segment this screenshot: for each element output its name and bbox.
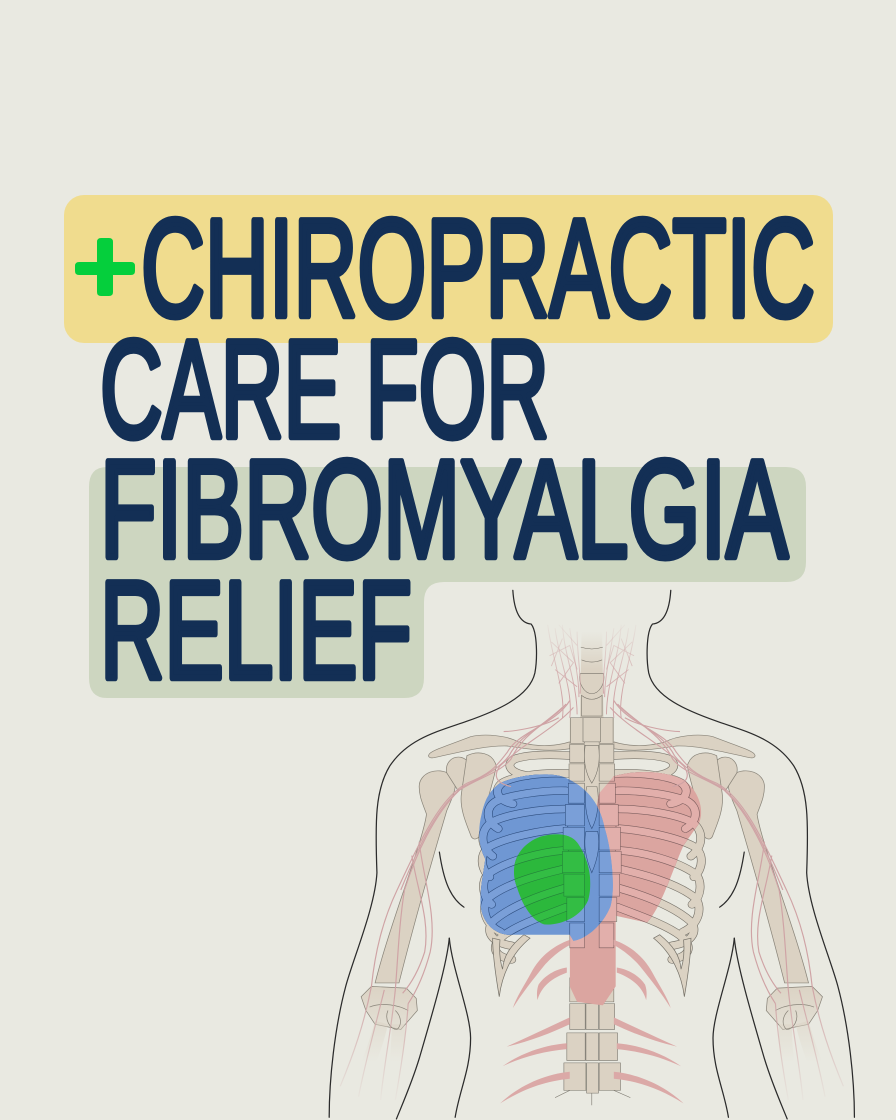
- nerves: neck bundle: [548, 625, 636, 718]
- skeleton: spine: [555, 632, 630, 1105]
- panel: yellow title highlight: [64, 195, 833, 343]
- skeleton: arm bones, clavicles and scapulae: [353, 735, 831, 1086]
- overlay: green region: [514, 834, 590, 925]
- title line: Care for: CARE FOR: [100, 312, 549, 467]
- overlay: red pain region: [570, 772, 702, 1006]
- body outline: [329, 590, 854, 1119]
- panel: sage title highlight: [89, 467, 806, 698]
- nerves: spinal branches: [500, 940, 570, 1103]
- illustration: anatomical torso: [329, 590, 854, 1119]
- title: [100, 191, 815, 708]
- nerves: shoulders and arms: [340, 701, 573, 1100]
- skeleton: rib cage: [482, 755, 701, 997]
- overlay: blue region: [479, 774, 613, 941]
- icon: green medical plus: [75, 238, 135, 296]
- title line: Relief: RELIEF: [100, 553, 412, 708]
